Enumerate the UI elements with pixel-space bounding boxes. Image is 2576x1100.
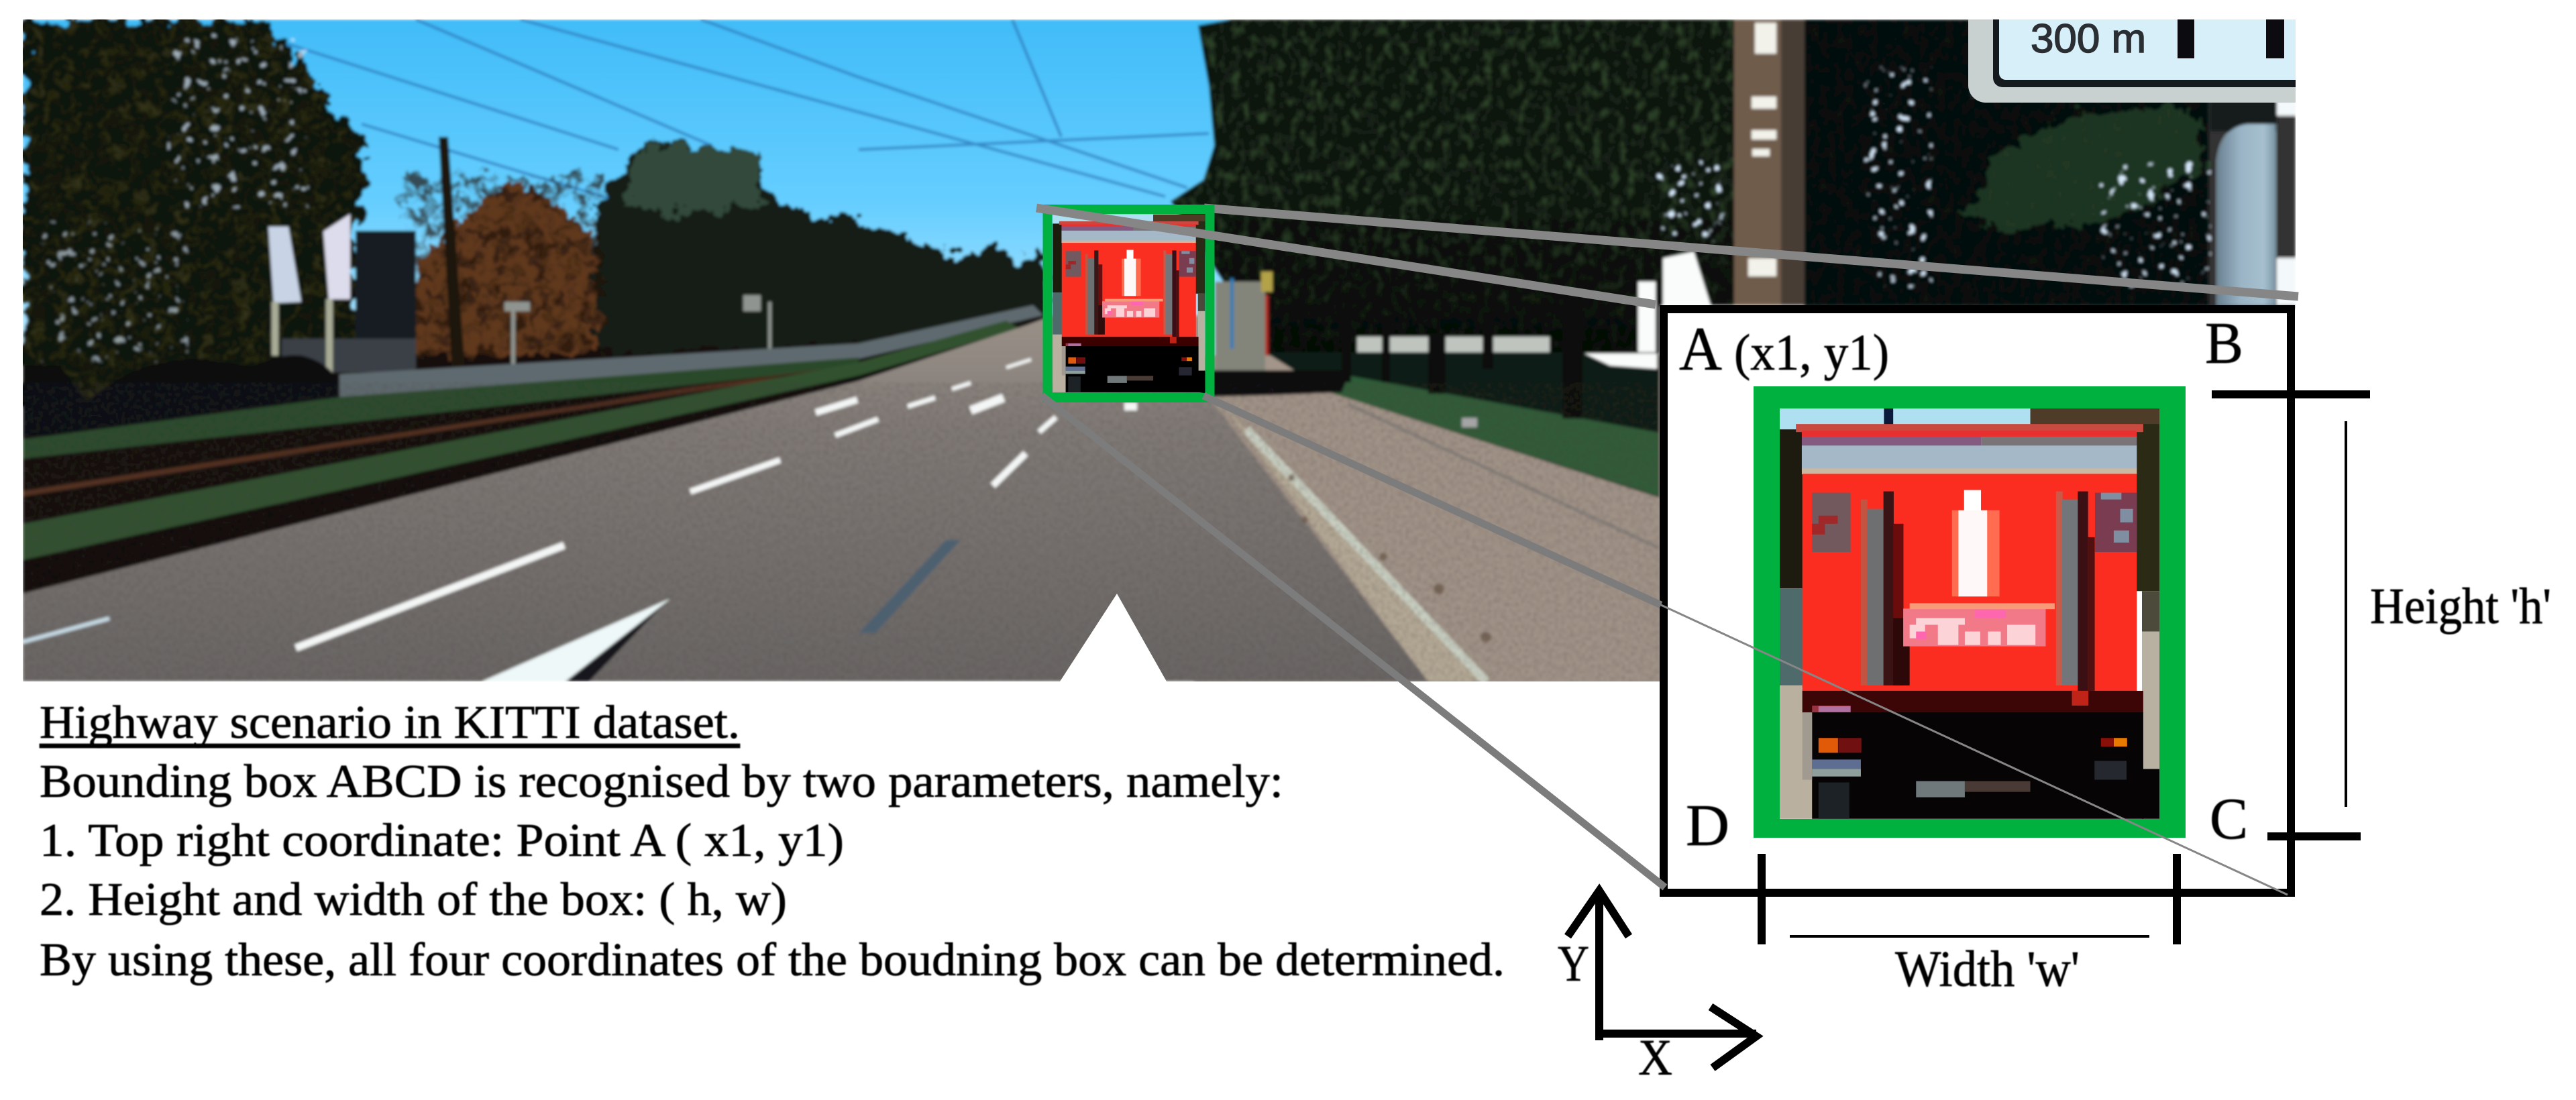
caption heading: Highway scenario in KITTI dataset. [40, 697, 740, 749]
caption line 4: 2. Height and width of the box: ( h, w) [40, 874, 787, 926]
caption line 3: 1. Top right coordinate: Point A ( x1, y1) [40, 815, 844, 867]
dark foliage right of pole [1805, 19, 2296, 308]
white sky gaps near box [1585, 252, 1711, 369]
kerb white line [1246, 429, 1486, 681]
second projection line [1036, 208, 1656, 305]
small truck in scene [1053, 215, 1205, 392]
inset right mid strip [2142, 591, 2159, 632]
truck tan trim [1802, 468, 2137, 474]
left under grey [1803, 712, 1812, 780]
caption line 5: By using these, all four coordinates of the boudning box can be determined. [40, 934, 1505, 986]
X axis [1595, 1007, 1756, 1068]
white marks on pole [1748, 23, 1776, 276]
axes arrows [1568, 891, 1756, 1068]
lilac stripe [1819, 706, 1851, 712]
truck grey purple stripe [1982, 437, 2137, 446]
bright gaps in foliage near pole [1865, 67, 1932, 295]
height line [2345, 421, 2347, 807]
faded blue lane mark [859, 540, 961, 633]
dark kerb [23, 327, 1023, 594]
label C: C [2210, 787, 2248, 852]
sign border [1993, 0, 2308, 87]
lower left projection line [1042, 396, 1665, 887]
main road [23, 315, 1428, 681]
tall dark pole [439, 137, 466, 376]
truck grey stripe [1802, 445, 2137, 469]
brown utility pole [1734, 19, 1805, 305]
sky specks in left tree [168, 34, 309, 208]
tick width right [2173, 854, 2181, 944]
Y axis [1568, 891, 1629, 1040]
left big tree [23, 19, 372, 422]
left reflector detail [1812, 516, 1838, 535]
tick B [2212, 390, 2370, 398]
inset sky [1780, 408, 2034, 433]
inset left dark strip [1780, 429, 1803, 588]
sign text: 300 m [2031, 16, 2146, 61]
left bar edge [1861, 500, 1868, 685]
inset left light strip [1780, 685, 1813, 819]
road arrow left [482, 598, 671, 681]
zoom box ABCD outline [1664, 309, 2291, 893]
overhead wires [284, 19, 1209, 201]
road shadow of truck [1201, 370, 1350, 397]
label width: Width 'w' [1895, 941, 2080, 997]
inset trees top right [2031, 408, 2159, 427]
background ground base [23, 288, 1053, 604]
kerb debris [1288, 474, 1491, 643]
road sign 300 m [1968, 0, 2310, 103]
logo highlights [1910, 618, 2035, 645]
left bar shadow lower [1893, 618, 1910, 685]
sign marks [2178, 19, 2284, 58]
left lower blue [1812, 759, 1861, 769]
zoomed truck inset [1780, 408, 2159, 819]
label Y: Y [1558, 936, 1589, 992]
right reflector detail [2101, 493, 2133, 543]
right red shade [2088, 537, 2095, 691]
logo magenta [1916, 610, 2006, 640]
lower right projection line [1203, 396, 1661, 605]
small green bounding box [1048, 209, 1210, 398]
lit grass edge [1330, 376, 1659, 496]
sky [23, 19, 1230, 355]
road arrow centre [1060, 594, 1167, 681]
pole shade [1781, 19, 1805, 305]
photo: highway scene from KITTI [23, 0, 2310, 684]
caption line 2: Bounding box ABCD is recognised by two parameters, namely: [40, 756, 1283, 808]
label X: X [1638, 1030, 1672, 1086]
sign post metal [2217, 124, 2275, 305]
truck artwork [1780, 408, 2159, 819]
bottle body [1958, 510, 1987, 596]
rail highlight near [23, 368, 859, 496]
right foliage base [1171, 19, 2296, 362]
grey sidewalk square [1462, 418, 1477, 427]
fence [282, 339, 416, 372]
bright gaps in foliage left of pole [1657, 161, 1724, 241]
inset left blue grey strip [1780, 588, 1803, 685]
sign face [1999, 0, 2308, 80]
autumn tree [405, 180, 600, 355]
roadside green trees [402, 141, 1050, 359]
rear black [1812, 712, 2143, 819]
right bar [2062, 500, 2078, 685]
label D: D [1686, 793, 1729, 859]
lane dashes [23, 360, 1137, 648]
logo base [1903, 608, 2045, 647]
truck red body [1803, 474, 2137, 692]
left tail red [1838, 738, 1862, 753]
inset right dark strip [2135, 424, 2159, 591]
lower dark red frame [1803, 691, 2143, 713]
inset right light strip [2142, 632, 2159, 769]
photo contents [23, 19, 2296, 684]
lit foliage by sign [1962, 107, 2207, 228]
distant trees mass [590, 141, 1050, 355]
arrow shadow [566, 594, 674, 681]
sign post dark top [2210, 98, 2277, 131]
building behind flags [356, 231, 416, 342]
right red block [2072, 691, 2088, 706]
label height: Height 'h' [2370, 578, 2551, 635]
pale kerb strip [1225, 407, 1490, 681]
inset right lower black [2142, 769, 2159, 819]
truck roof edge [1796, 424, 2143, 432]
tree trunks [1342, 291, 1582, 419]
heading underline [40, 744, 740, 748]
left tree clipped mass [23, 19, 372, 422]
right tail orange [2114, 738, 2127, 747]
parked cars [23, 355, 339, 436]
right lower grey [2094, 761, 2127, 780]
sidewalk crack line [1348, 404, 1659, 548]
bottle neck [1964, 490, 1981, 512]
left reflector [1812, 493, 1851, 552]
right foliage texture [1171, 19, 2296, 362]
left sidewalk [339, 305, 1043, 397]
label B: B [2205, 311, 2243, 376]
dimension ticks [1758, 390, 2370, 944]
label A: A [1679, 315, 1722, 383]
distant bright band [1357, 337, 1550, 353]
tick width left [1758, 854, 1766, 944]
label x1 y1: (x1, y1) [1734, 325, 1889, 381]
bright gaps in foliage near post [2100, 154, 2210, 288]
dark grass under trees [1265, 352, 1660, 498]
thin diagonal inside box [1661, 605, 2288, 895]
logo top row [1910, 603, 2055, 609]
left lower pale [1812, 769, 1861, 777]
tick C [2267, 832, 2361, 840]
large green bounding box [1754, 386, 2186, 838]
bottle glow [1952, 510, 2000, 596]
left bar dark red [1893, 524, 1903, 685]
left red bar [1812, 706, 1851, 718]
small street signs [504, 295, 771, 377]
flag banners [268, 214, 350, 373]
right bar shadow [2078, 492, 2088, 691]
left tail lamp [1819, 738, 1838, 753]
sky at far right [2277, 94, 2296, 305]
caption text block [40, 697, 1505, 986]
roadside poles [1230, 272, 1273, 355]
rail bed [23, 366, 859, 526]
lit tree tops [621, 144, 761, 215]
rail highlight far [268, 364, 859, 459]
lower grass strip [23, 321, 1020, 560]
sidewalk and verge ground [1194, 355, 1664, 684]
upper grass strip [23, 358, 859, 459]
right bar edge [2056, 492, 2063, 685]
number plate left [1916, 781, 1965, 798]
left bar shadow [1884, 492, 1894, 685]
autumn tree shade [402, 174, 604, 359]
dark lower foliage [1171, 188, 1741, 355]
right tail red [2101, 738, 2114, 747]
right reflector [2095, 493, 2137, 552]
sign plate [1968, 0, 2310, 103]
sky specks lower left tree [40, 221, 188, 362]
box labels [1558, 311, 2551, 1086]
top projection line [1204, 208, 2298, 296]
inset pole top [1884, 408, 1893, 425]
ground past truck [1215, 282, 1265, 372]
left bar [1868, 509, 1884, 685]
number plate right [1965, 781, 2031, 792]
truck purple stripe [1802, 437, 1982, 446]
width line [1790, 935, 2149, 938]
truck roof red [1802, 431, 2137, 437]
left lower dark [1819, 783, 1849, 819]
road noise [23, 382, 1660, 681]
